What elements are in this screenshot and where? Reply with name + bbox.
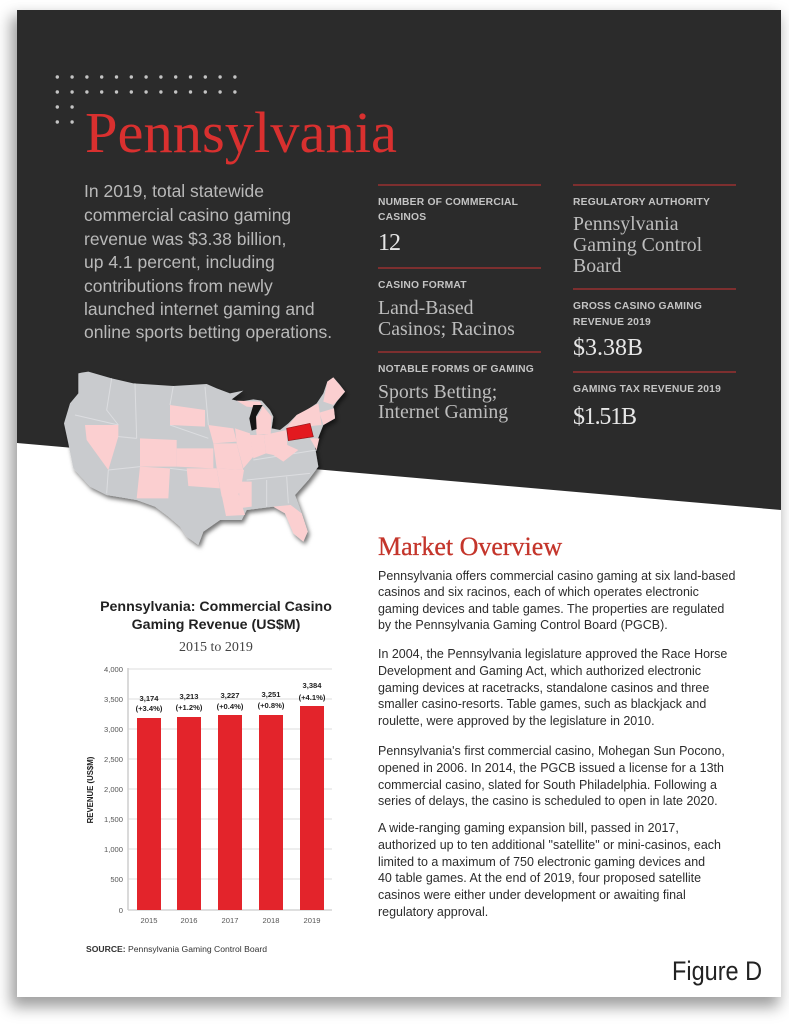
stats column right: GROSS CASINO GAMING xyxy=(573,301,702,312)
decorative dot grid xyxy=(56,75,237,124)
y axis labels xyxy=(104,665,123,915)
value labels: 3,227 xyxy=(220,691,240,700)
chart title: Gaming Revenue (US$M) xyxy=(132,617,301,633)
Pennsylvania state xyxy=(287,423,313,441)
market overview text: authorized up to ten additional "satellite" or mini-casinos, each xyxy=(378,838,721,852)
x axis labels: 2015 xyxy=(141,916,157,925)
stats column right: $3.38B xyxy=(573,335,643,361)
stats column right: Pennsylvania xyxy=(573,213,678,235)
stats column right: Board xyxy=(573,255,621,277)
intro text block: up 4.1 percent, including xyxy=(84,252,275,272)
value labels: (+0.4%) xyxy=(217,702,244,711)
stats column left: CASINOS xyxy=(378,212,426,223)
heading: Market Overview: Market Overview xyxy=(378,532,562,561)
x axis labels: 2017 xyxy=(222,916,238,925)
market overview text: Development and Gaming Act, which authorized electronic xyxy=(378,664,701,678)
stats column left: Casinos; Racinos xyxy=(378,318,515,340)
value labels xyxy=(136,681,326,713)
market overview text: opened in 2006. In 2014, the PGCB issued a license for a 13th xyxy=(378,761,724,775)
market overview text: roulette, were approved by the legislature in 2010. xyxy=(378,714,655,728)
stats column right: Gaming Control xyxy=(573,234,702,256)
value labels: (+1.2%) xyxy=(176,703,203,712)
value labels: 3,174 xyxy=(139,694,159,703)
y axis labels: 2,000 xyxy=(104,785,123,794)
source note: SOURCE: Pennsylvania Gaming Control Board xyxy=(86,944,267,954)
market overview text: limited to a maximum of 750 electronic gaming devices and xyxy=(378,855,705,869)
stats column right: $1.51B xyxy=(573,404,636,430)
chart title: Pennsylvania: Commercial Casino xyxy=(100,599,332,615)
stats column right: REGULATORY AUTHORITY xyxy=(573,197,710,208)
value labels: 3,251 xyxy=(261,690,281,699)
value labels: 3,213 xyxy=(179,692,199,701)
value labels: 3,384 xyxy=(302,681,322,690)
x axis labels: 2016 xyxy=(181,916,197,925)
stats column left: Sports Betting; xyxy=(378,381,497,403)
y axis labels: 4,000 xyxy=(104,665,123,674)
y axis labels: 2,500 xyxy=(104,755,123,764)
intro text block: In 2019, total statewide xyxy=(84,181,264,201)
market overview text xyxy=(378,569,735,919)
intro text block: launched internet gaming and xyxy=(84,299,315,319)
chart subtitle: 2015 to 2019 xyxy=(179,640,253,655)
stats column left: Internet Gaming xyxy=(378,401,508,423)
intro text block: contributions from newly xyxy=(84,276,273,296)
bars xyxy=(137,706,324,910)
y axis labels: 3,500 xyxy=(104,695,123,704)
market overview text: by the Pennsylvania Gaming Control Board (PGCB). xyxy=(378,618,668,632)
stats column right: REVENUE 2019 xyxy=(573,317,651,328)
stats column left: NUMBER OF COMMERCIAL xyxy=(378,197,518,208)
y axis labels: 500 xyxy=(110,875,123,884)
stats column left: 12 xyxy=(378,230,400,256)
market overview text: commercial casino, slated for South Philadelphia. Following a xyxy=(378,778,717,792)
stats column left: Land-Based xyxy=(378,297,474,319)
market overview text: 40 table games. At the end of 2019, four proposed satellite xyxy=(378,871,701,885)
x axis labels: 2018 xyxy=(263,916,279,925)
market overview text: gaming devices at racetracks, standalone casinos and three xyxy=(378,681,709,695)
x axis labels xyxy=(141,916,320,925)
figure label: Figure D xyxy=(672,956,762,986)
y axis title: REVENUE (US$M) xyxy=(86,756,95,823)
market overview text: gaming devices and table games. The properties are regulated xyxy=(378,602,724,616)
market overview text: series of delays, the casino is scheduled to open in late 2020. xyxy=(378,794,718,808)
market overview text: In 2004, the Pennsylvania legislature approved the Race Horse xyxy=(378,647,727,661)
market overview text: smaller casino-resorts. Table games, such as blackjack and xyxy=(378,697,706,711)
y axis labels: 1,500 xyxy=(104,815,123,824)
x axis labels: 2019 xyxy=(304,916,320,925)
chart title xyxy=(100,599,332,633)
stats column left xyxy=(378,184,541,423)
stats column right xyxy=(573,184,736,430)
stats column left: NOTABLE FORMS OF GAMING xyxy=(378,364,534,375)
y axis labels: 1,000 xyxy=(104,845,123,854)
market overview text: regulatory approval. xyxy=(378,905,488,919)
title: Pennsylvania xyxy=(85,100,397,165)
market overview text: Pennsylvania's first commercial casino, Mohegan Sun Pocono, xyxy=(378,744,725,758)
market overview text: casinos and six racinos, each of which operates electronic xyxy=(378,585,699,599)
y axis labels: 0 xyxy=(119,906,123,915)
value labels: (+0.8%) xyxy=(258,701,285,710)
intro text block: revenue was $3.38 billion, xyxy=(84,229,286,249)
map: United States with Pennsylvania highlighted xyxy=(64,372,346,550)
stats column right: GAMING TAX REVENUE 2019 xyxy=(573,384,721,395)
value labels: (+3.4%) xyxy=(136,704,163,713)
y axis labels: 3,000 xyxy=(104,725,123,734)
market overview text: casinos were either under development or awaiting final xyxy=(378,888,686,902)
intro text block: commercial casino gaming xyxy=(84,205,291,225)
intro text block: online sports betting operations. xyxy=(84,322,332,342)
market overview text: Pennsylvania offers commercial casino gaming at six land-based xyxy=(378,569,735,583)
stats column left: CASINO FORMAT xyxy=(378,280,467,291)
value labels: (+4.1%) xyxy=(299,693,326,702)
bar chart xyxy=(86,599,332,954)
market overview text: A wide-ranging gaming expansion bill, passed in 2017, xyxy=(378,821,679,835)
lake michigan xyxy=(249,405,263,431)
intro text block xyxy=(84,181,332,342)
gridlines and axes xyxy=(128,668,332,910)
